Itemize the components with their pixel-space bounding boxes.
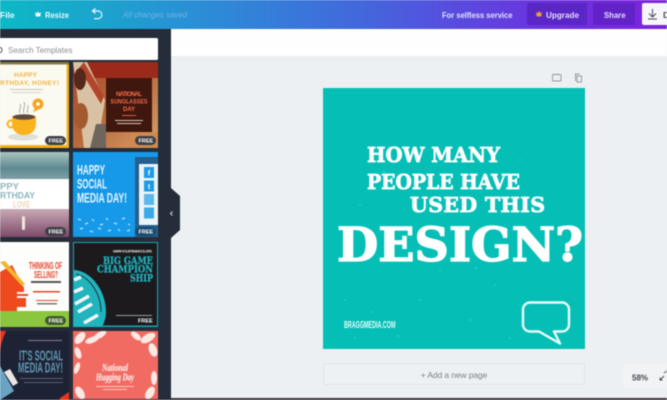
- headline: DESIGN?: [337, 218, 583, 273]
- football graphic: [74, 270, 106, 327]
- icon: page note: [552, 74, 561, 81]
- headline: IT'S SOCIAL: [19, 348, 63, 364]
- template: birthday coffee card: HAPPY: [14, 72, 38, 79]
- zoom control: 58%: [632, 374, 648, 382]
- headline: BIG GAME: [103, 255, 153, 267]
- template: its social media day: [0, 331, 69, 400]
- sunglasses text panel: SUNGLASSES: [110, 100, 148, 106]
- template: birthday coffee card: [0, 62, 69, 148]
- template search box: Search Templates: [8, 45, 72, 55]
- brand url: BRAGGMEDIA.COM: [344, 319, 396, 331]
- zoom control: [623, 364, 667, 388]
- headline: MEDIA DAY!: [77, 190, 127, 206]
- free badge: FREE: [48, 318, 64, 324]
- white options bar: [171, 29, 667, 56]
- sidebar collapse tab: [170, 188, 180, 238]
- free badge: FREE: [138, 138, 154, 144]
- template: happy social media day: [73, 152, 158, 237]
- leaf border: [72, 329, 159, 400]
- add a new page button: [324, 364, 584, 384]
- team name: For selfless service: [442, 10, 513, 20]
- speckle texture: [344, 159, 521, 339]
- headline: [77, 162, 127, 206]
- template: happy birthday love: RTHDAY: [0, 190, 36, 202]
- icon: undo arrow: [92, 8, 102, 19]
- free badge: FREE: [138, 230, 154, 236]
- headline: SHIP: [130, 272, 153, 284]
- save status: All changes saved: [122, 10, 188, 20]
- headline: CHAMPION: [97, 264, 153, 276]
- sunglasses text panel: DAY: [123, 107, 135, 113]
- template: thinking of selling: SELLING?: [34, 270, 58, 281]
- template: national hugging day: [72, 329, 159, 400]
- social icons column: f: [148, 168, 151, 178]
- sunglasses text panel: NATIONAL: [116, 92, 142, 98]
- free badge: FREE: [48, 138, 64, 144]
- template: national hugging day: National: [101, 363, 128, 374]
- headline: USED THIS: [410, 193, 545, 217]
- add a new page button: + Add a new page: [421, 370, 488, 380]
- icon: duplicate page: [576, 74, 582, 82]
- design canvas: teal social post: [323, 88, 585, 349]
- download button: [642, 3, 667, 25]
- icon: speech bubble: [523, 302, 569, 344]
- social icons column: t: [148, 184, 151, 191]
- headline: HAPPY: [77, 162, 105, 178]
- icon: coffee mug: [8, 102, 36, 135]
- upgrade button: Upgrade: [546, 10, 579, 20]
- template: birthday coffee card: RTHDAY, HONEY!: [0, 80, 59, 87]
- template: big game championship: [73, 242, 158, 327]
- editor canvas background: [171, 29, 667, 400]
- template: national hugging day: Hugging Day: [95, 372, 134, 384]
- headline: [18, 350, 64, 374]
- template: big game championship: FREE: [138, 318, 153, 324]
- share button: [593, 3, 635, 25]
- template search box: [0, 38, 158, 60]
- file menu: File: [0, 10, 15, 20]
- upgrade button: [527, 3, 587, 25]
- template: thinking of selling: [0, 242, 69, 327]
- template: thinking of selling: THINKING OF: [29, 261, 62, 272]
- headline: HOW MANY: [367, 143, 500, 167]
- icon: house: [0, 261, 28, 311]
- template: national sunglasses day: [73, 62, 158, 148]
- template: happy birthday love: LOVE: [13, 200, 30, 210]
- headline: PEOPLE HAVE: [367, 170, 520, 194]
- share button: Share: [604, 10, 626, 20]
- top toolbar: [0, 0, 667, 29]
- resize button: Resize: [45, 10, 69, 20]
- headline: [337, 143, 583, 273]
- headline: MEDIA DAY!: [18, 360, 63, 376]
- icon: heart bubble: [32, 98, 44, 112]
- headline: SOCIAL: [77, 176, 107, 192]
- bottom edge shadow: [171, 398, 667, 400]
- resize button: [35, 10, 69, 20]
- social icons column: [135, 157, 158, 237]
- headline: [97, 255, 153, 284]
- sunglasses text panel: [106, 78, 152, 132]
- sidebar panel: [0, 29, 180, 400]
- template: happy birthday love: [0, 152, 69, 237]
- free badge: FREE: [48, 230, 64, 236]
- template: happy birthday love: PPY: [0, 182, 20, 192]
- template: big game championship: MARK YOUR TEAM COLORS: [113, 248, 152, 254]
